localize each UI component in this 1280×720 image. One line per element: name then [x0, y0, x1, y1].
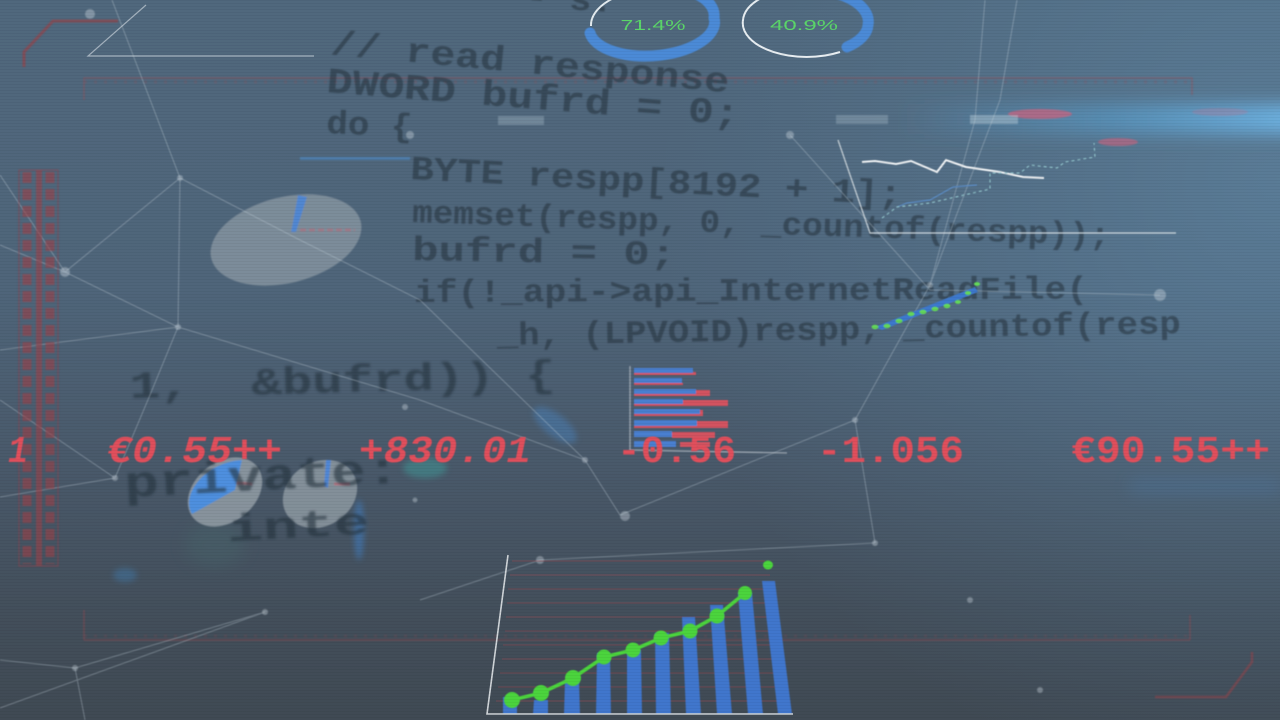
code line: bufrd: bufrd = 0;: [412, 233, 676, 276]
code text blurred foreground: [123, 355, 556, 553]
code line: inte: inte: [226, 503, 370, 553]
ticker value: -1.056: -1.056: [817, 431, 964, 474]
donut gauge: 40.9%: [743, 0, 868, 57]
chart grid lines: [496, 561, 790, 701]
white triangle lines: [88, 5, 314, 56]
horizontal bar chart: [630, 366, 787, 453]
chart bars: [503, 581, 792, 714]
code line: LPVOID: _h, (LPVOID)respp, _countof(resp: [495, 306, 1181, 355]
chart axes: [487, 555, 793, 714]
red dashed frame: [84, 78, 1192, 640]
green line series: [504, 560, 773, 708]
code line: if: if(!_api->api_InternetReadFile(: [414, 271, 1088, 312]
donut gauge: 71.4%: [590, 0, 715, 56]
red ticker values: [8, 431, 1270, 474]
chart axes: [838, 140, 1176, 233]
column and line chart: [487, 555, 793, 714]
donut label: 71.4%: [620, 17, 686, 34]
pie chart: small left: [174, 443, 276, 541]
corner bracket: bottom right: [1155, 652, 1252, 697]
ticker value: 90.55: €90.55++: [1071, 431, 1270, 474]
red ladder gauge: [19, 170, 58, 566]
code line: read response: // read response: [329, 25, 731, 103]
mini scatter band: [872, 282, 980, 330]
bar axes: [630, 366, 787, 453]
code line: BYTE: BYTE respp[8192 + 1];: [409, 152, 903, 216]
pie chart: large: [201, 180, 371, 300]
white series: [862, 160, 1044, 178]
code line: private: private:: [123, 447, 401, 511]
pie chart: small right: [270, 446, 370, 542]
ticker value: -0.56: -0.56: [617, 431, 736, 474]
ticker value: 830.01: +830.01: [359, 431, 531, 474]
lens glare streaks: [113, 104, 1280, 582]
blue series: [897, 185, 977, 207]
dashed series: [882, 143, 1095, 218]
ticker value: 0.55: €0.55++: [107, 431, 282, 474]
code line: DWORD: DWORD bufrd = 0;: [325, 62, 741, 136]
red bars: [634, 372, 728, 447]
code line: bufrd pointer: 1, &bufrd)) {: [129, 355, 556, 410]
donut label: 40.9%: [770, 17, 838, 34]
ticker value fragment: 1: [8, 431, 28, 474]
line chart: upper right: [838, 140, 1176, 233]
code line: memset: memset(respp, 0, _countof(respp));: [412, 195, 1111, 255]
code line: do: do {: [326, 106, 413, 147]
corner bracket: top left: [24, 21, 118, 67]
blue bars: [634, 368, 700, 447]
code text: [325, 0, 1181, 355]
